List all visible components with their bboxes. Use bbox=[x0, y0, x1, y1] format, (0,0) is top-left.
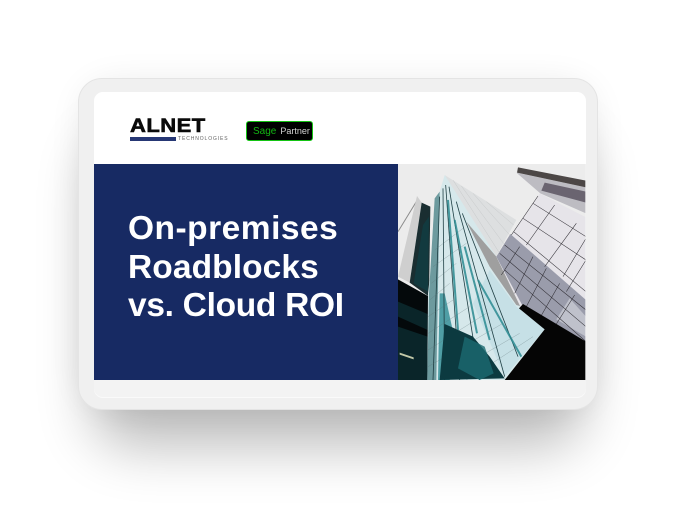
title: On-premises bbox=[128, 210, 338, 247]
header bar bbox=[94, 92, 586, 164]
title panel bbox=[94, 164, 398, 380]
badge: Sage Partner: Sage Partner bbox=[253, 126, 310, 137]
tablet shadow bbox=[92, 135, 584, 447]
logo: Alnet Technologies bbox=[130, 115, 229, 142]
title bbox=[128, 210, 344, 324]
tablet frame bbox=[78, 78, 598, 410]
soft tablet glow bbox=[84, 84, 592, 404]
logo: Alnet Technologies: TECHNOLOGIES bbox=[178, 136, 229, 142]
photo: glass skyscrapers bbox=[398, 167, 586, 380]
badge: Sage Partner bbox=[246, 121, 313, 141]
title: Roadblocks bbox=[128, 248, 319, 286]
title: vs. Cloud ROI bbox=[128, 287, 344, 324]
tablet screen bbox=[94, 92, 586, 397]
logo: Alnet Technologies: ALNET bbox=[130, 115, 206, 137]
